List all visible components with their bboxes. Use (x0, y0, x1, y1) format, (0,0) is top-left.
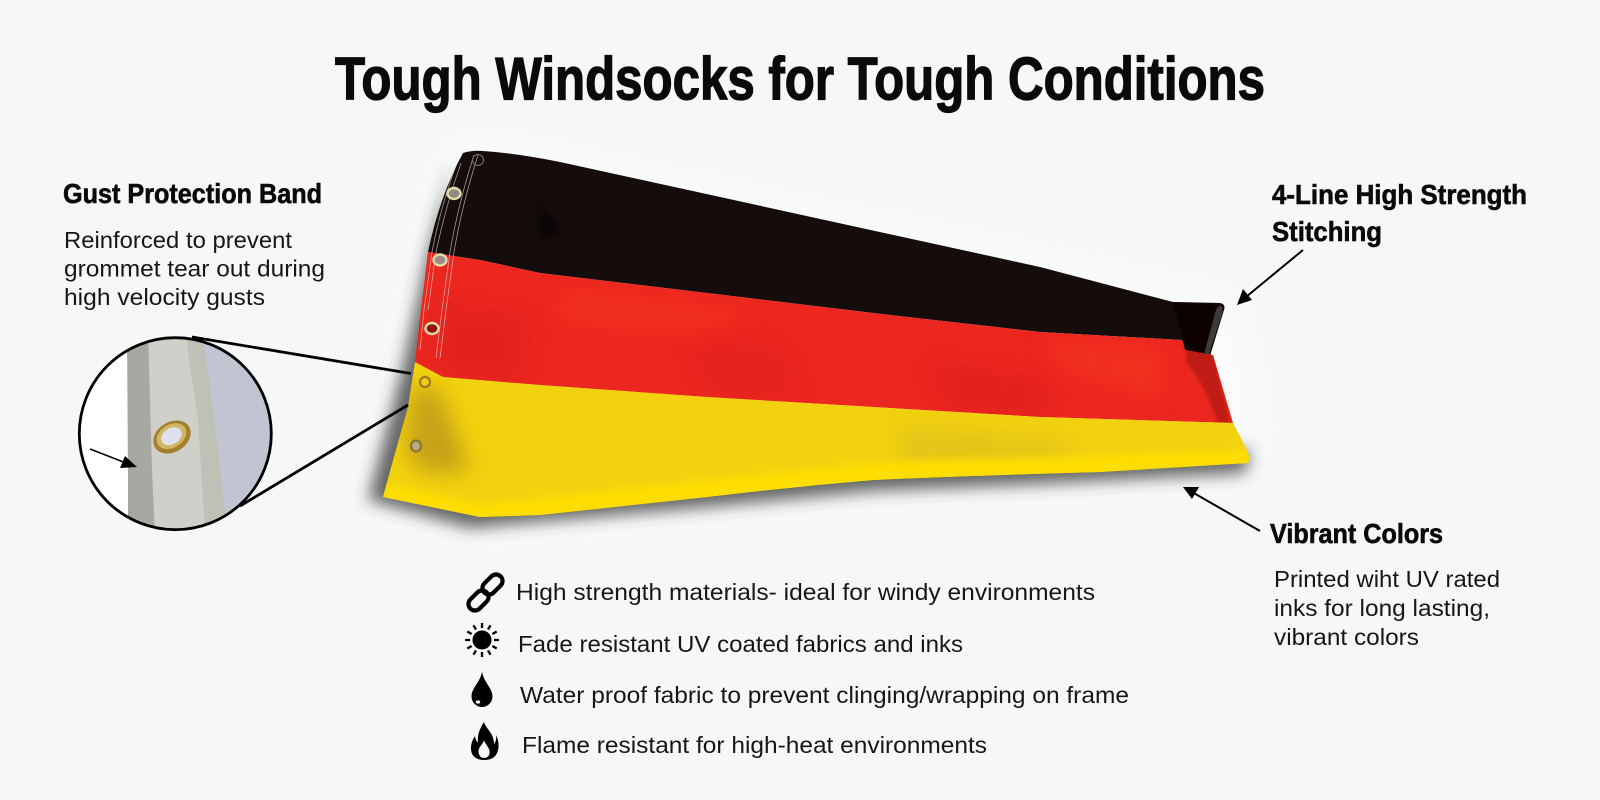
feature: flame resistant: Flame resistant for high-heat environments (522, 732, 987, 758)
icon: flame (471, 722, 499, 760)
darker stitched strip (186, 340, 226, 524)
text block: gust protection band (64, 227, 325, 310)
small end stitch band (1204, 306, 1223, 354)
text block: gust protection band: high velocity gusts (64, 284, 265, 310)
heading: 4-line high strength stitching: 4-Line High Strength (1272, 179, 1527, 210)
fabric shading on red (954, 350, 1230, 423)
text block: vibrant colors (1274, 566, 1500, 650)
gray reinforcement band (127, 343, 154, 526)
title: Tough Windsocks for Tough Conditions (335, 46, 1265, 112)
heading: 4-line high strength stitching (1272, 179, 1527, 247)
sock shadow (368, 165, 1250, 528)
text block: gust protection band: grommet tear out during (64, 256, 325, 282)
heading: vibrant colors: Vibrant Colors (1270, 518, 1443, 549)
heading: gust protection band: Gust Protection Band (63, 178, 322, 209)
stitching lines (420, 155, 478, 358)
windsock illustration (368, 151, 1250, 530)
text block: vibrant colors: Printed wiht UV rated (1274, 566, 1500, 592)
brass grommet (147, 414, 197, 460)
heading: 4-line high strength stitching: Stitching (1272, 216, 1382, 247)
arrow: vibrant colors (1183, 487, 1260, 531)
grommets on sock (411, 154, 484, 452)
text block: gust protection band: Reinforced to prevent (64, 227, 293, 253)
feature list (465, 572, 1129, 760)
callout zoom lines (192, 337, 411, 506)
feature: high strength: High strength materials- ideal for windy environments (516, 579, 1095, 605)
icon: sun (465, 623, 499, 657)
fabric shading on yellow (380, 385, 1250, 530)
dark fold on black (542, 214, 556, 234)
yellow panel (383, 362, 1250, 517)
lilac backing (191, 344, 270, 527)
soft halo (383, 153, 1250, 517)
feature: water proof: Water proof fabric to prevent clinging/wrapping on frame (520, 682, 1129, 708)
text block: vibrant colors: inks for long lasting, (1274, 595, 1490, 621)
icon: chain link (466, 572, 505, 613)
text block: vibrant colors: vibrant colors (1274, 624, 1419, 650)
red panel (415, 252, 1233, 423)
feature: fade resistant: Fade resistant UV coated fabrics and inks (518, 631, 963, 657)
black panel (428, 151, 1224, 356)
arrow: stitching (1237, 250, 1303, 305)
icon: water drop (472, 672, 492, 707)
light fabric (148, 339, 204, 528)
arrow: gust band detail (90, 449, 137, 468)
detail circle: gust protection band (79, 330, 280, 535)
